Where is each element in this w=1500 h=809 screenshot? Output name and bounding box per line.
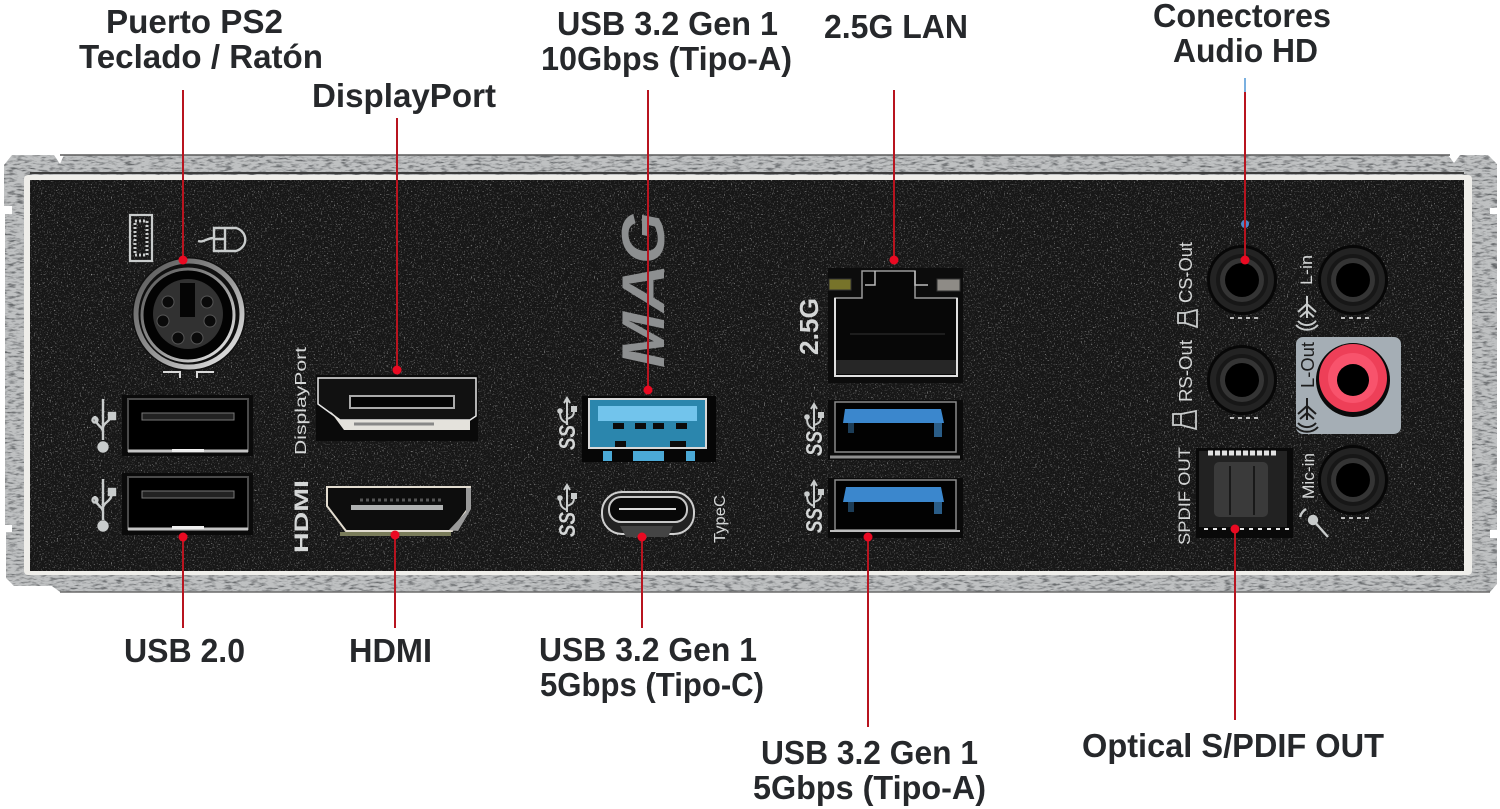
label: HDMI: HDMI [349, 632, 432, 669]
leader: USB Type-A [864, 532, 872, 727]
printed label: 2.5G: 2.5G [794, 298, 824, 355]
icon: SS trident bottom [558, 485, 576, 512]
audio jack: RS-Out [1207, 345, 1277, 418]
label: USB 3.2 Gen 1 10Gbps: USB 3.2 Gen 1 [557, 5, 778, 42]
audio marker dot [1241, 220, 1249, 228]
audio jack: CS-Out [1207, 245, 1277, 318]
port: USB Type-C [602, 492, 694, 537]
icon: microphone [1300, 509, 1328, 537]
label: USB 3.2 Gen 1 Tipo-A: USB 3.2 Gen 1 [761, 734, 978, 771]
label: Puerto PS2: Teclado / Ratón [79, 38, 323, 75]
printed label: TypeC: TypeC [712, 495, 729, 543]
leader: HDMI [390, 530, 400, 628]
printed label: L-in: L-in [1297, 255, 1316, 285]
port: USB 3.2 10Gbps Type-A [582, 396, 716, 462]
leader: USB 10Gbps [644, 90, 652, 394]
printed label: SS lower: SS [801, 507, 827, 533]
printed label: DisplayPort: DisplayPort [293, 346, 310, 455]
label: USB 3.2 Gen 1 Tipo-C: 5Gbps (Tipo-C) [540, 666, 764, 703]
icon: speaker RS [1173, 411, 1196, 429]
printed label: Mic-in: Mic-in [1299, 453, 1318, 499]
icon: USB symbol bottom [92, 479, 115, 530]
leader: Audio HD [1240, 78, 1250, 264]
label: DisplayPort: DisplayPort [312, 77, 496, 114]
icon: USB symbol top [92, 399, 115, 452]
printed label: SS upper: SS [801, 430, 827, 456]
printed label: CS-Out: CS-Out [1176, 242, 1196, 303]
printed label: SS bottom: SS [554, 511, 580, 537]
leader: USB Type-C [638, 532, 646, 628]
label: Puerto PS2: Puerto PS2 [106, 3, 283, 40]
label: 2.5G LAN: 2.5G LAN [824, 8, 968, 45]
black faceplate [30, 180, 1464, 571]
port: USB 3.2 Type-A lower [828, 478, 963, 538]
printed label: L-Out: L-Out [1298, 342, 1318, 388]
port: HDMI [327, 487, 471, 534]
label: Conectores Audio HD: Audio HD [1173, 32, 1318, 69]
label: Optical S/PDIF OUT: Optical S/PDIF OUT [1082, 727, 1384, 764]
icon: wave L-Out [1296, 398, 1318, 432]
icon: speaker CS [1178, 310, 1197, 327]
icon: SS trident upper [805, 404, 823, 431]
port: USB 2.0 top [122, 395, 253, 456]
label: USB 3.2 Gen 1 10Gbps: 10Gbps (Tipo-A) [541, 40, 792, 77]
label: USB 3.2 Gen 1 Tipo-C: USB 3.2 Gen 1 [539, 631, 757, 668]
port: PS2 [132, 257, 246, 378]
audio jack: L-in [1318, 245, 1388, 318]
audio jack: L-Out [1316, 343, 1390, 417]
icon: keyboard [130, 215, 152, 261]
icon: wave L-in [1296, 296, 1318, 330]
leader: Puerto PS2 [178, 90, 188, 264]
label: USB 2.0: USB 2.0 [124, 632, 245, 669]
leader: 2.5G LAN [890, 90, 898, 264]
icon: SS trident top [558, 398, 576, 425]
printed logo: MAG: MAG [610, 212, 677, 368]
port: DisplayPort [316, 375, 478, 441]
printed label: RS-Out: RS-Out [1176, 340, 1196, 402]
port: USB 2.0 bottom [122, 473, 253, 535]
panel: L-Out highlight [1296, 337, 1401, 434]
icon: mouse [198, 228, 245, 251]
audio jack: Mic-in [1318, 445, 1388, 518]
port: 2.5G LAN [828, 268, 963, 383]
leader: DisplayPort [392, 118, 402, 374]
printed label: HDMI: HDMI [292, 480, 313, 553]
leader: Optical S/PDIF [1230, 524, 1240, 720]
port: optical S/PDIF [1196, 448, 1293, 538]
printed label: SS top: SS [554, 424, 580, 450]
panel: metal I/O shield [4, 155, 1497, 592]
printed label: SPDIF OUT: SPDIF OUT [1175, 447, 1194, 545]
icon: SS trident lower [805, 481, 823, 508]
port: USB 3.2 Type-A upper [828, 400, 963, 460]
label: USB 3.2 Gen 1 Tipo-A: 5Gbps (Tipo-A) [753, 769, 986, 806]
leader: USB 2.0 [178, 532, 188, 628]
